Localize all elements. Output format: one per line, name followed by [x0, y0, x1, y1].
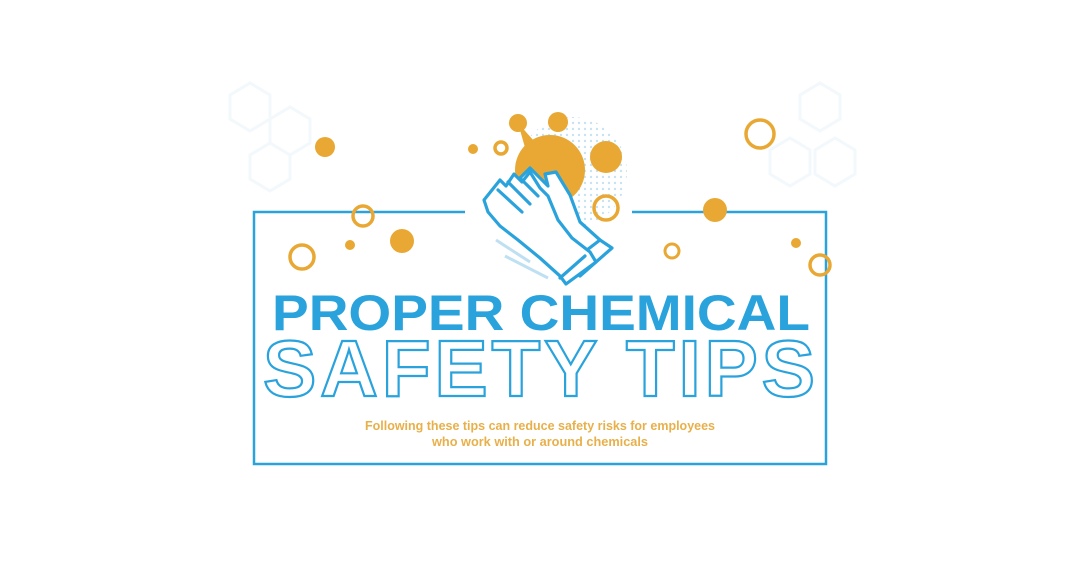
frame	[254, 212, 826, 464]
subtitle	[365, 419, 715, 449]
subtitle: who work with or around chemicals	[431, 435, 648, 449]
title line 2: SAFETY TIPS	[263, 324, 815, 413]
icon: gloves with splash	[468, 112, 627, 284]
subtitle: Following these tips can reduce safety risks for employees	[365, 419, 715, 433]
back glove	[510, 168, 612, 276]
decorative circles	[290, 120, 830, 275]
title line 1: PROPER CHEMICAL	[272, 285, 810, 341]
front glove	[484, 172, 596, 284]
